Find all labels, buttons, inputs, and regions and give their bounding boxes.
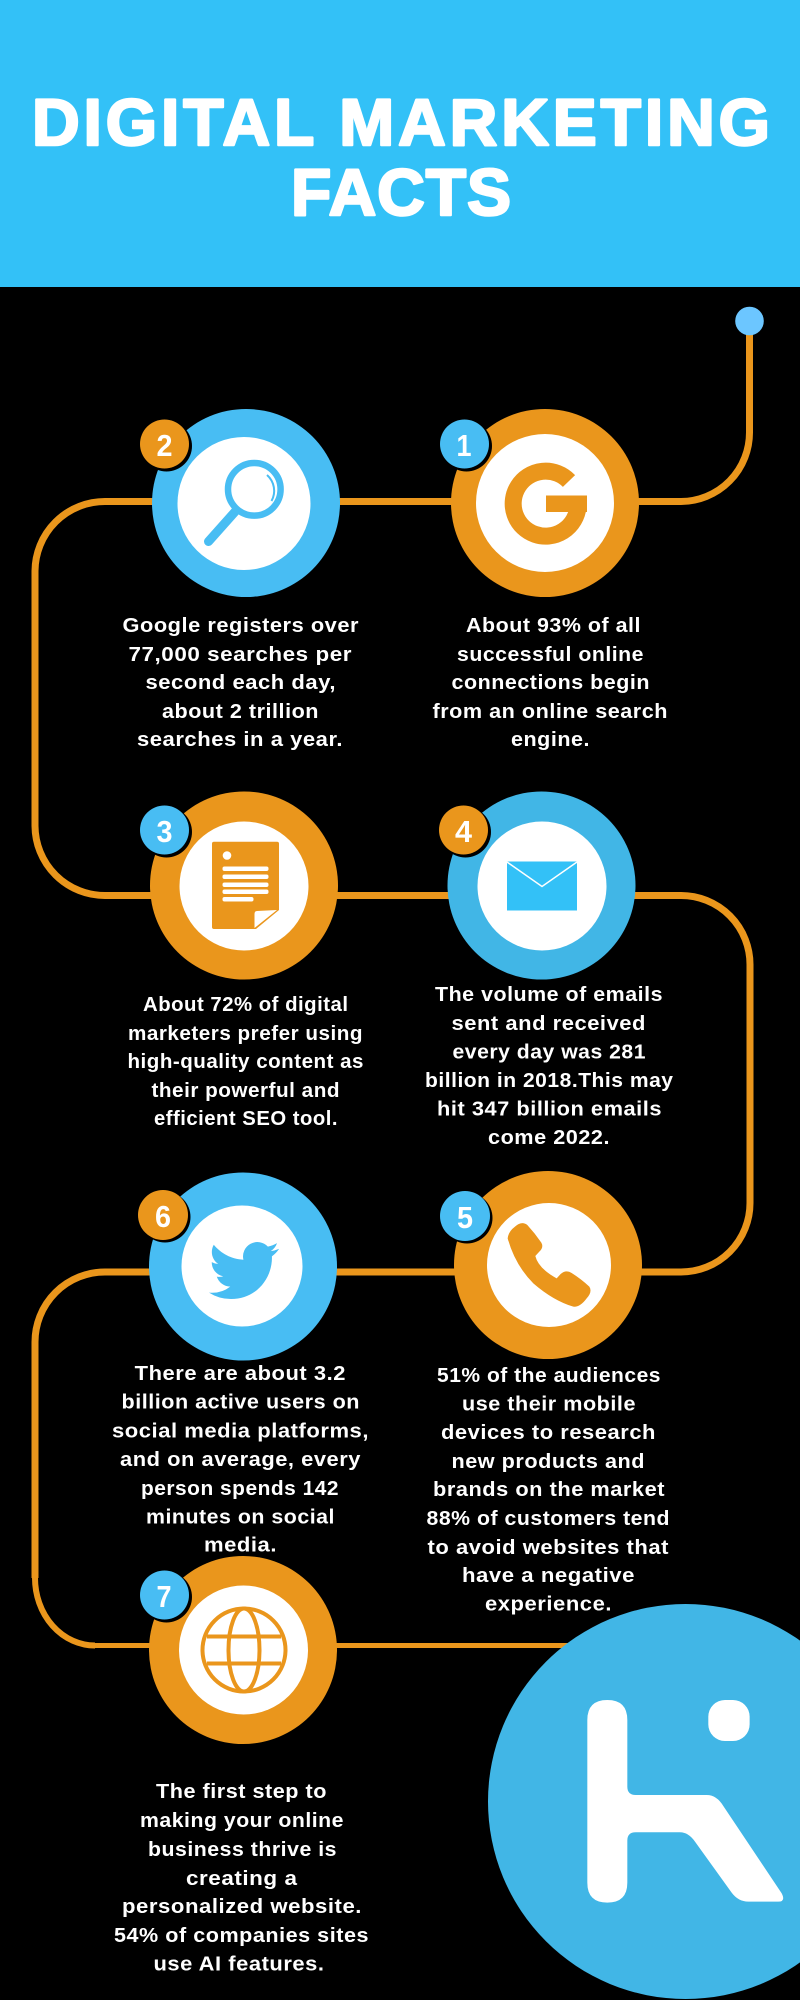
badge 2: 2 xyxy=(156,428,172,463)
icon: envelope xyxy=(507,862,577,910)
text: fact 2: 77,000 searches per xyxy=(128,643,352,666)
text: fact 2: Google registers over xyxy=(122,614,359,637)
text: fact 7: 54% of companies sites xyxy=(114,1924,369,1947)
icon: twitter bird xyxy=(209,1242,279,1299)
text: fact 7: personalized website. xyxy=(122,1895,362,1918)
badge 4 xyxy=(439,806,491,858)
step 3: content xyxy=(140,792,338,980)
text: fact 2: second each day, xyxy=(146,671,336,694)
connector path xyxy=(35,321,750,1646)
text: fact 3: About 72% of digital xyxy=(143,993,348,1016)
title xyxy=(32,85,770,229)
step 5: phone xyxy=(440,1171,642,1359)
badge 4: 4 xyxy=(455,814,473,849)
text: fact 6: billion active users on xyxy=(122,1390,360,1414)
text: fact 5: have a negative xyxy=(462,1564,635,1587)
text: fact 1 xyxy=(432,614,668,751)
text: fact 4: sent and received xyxy=(452,1012,646,1035)
text: fact 7: creating a xyxy=(186,1867,298,1890)
text: fact 4: come 2022. xyxy=(488,1126,610,1149)
text: fact 2 xyxy=(122,614,359,751)
icon: google G xyxy=(513,471,587,536)
text: fact 7: use AI features. xyxy=(154,1953,324,1976)
text: fact 2: searches in a year. xyxy=(137,728,343,751)
title: FACTS xyxy=(291,155,511,229)
text: fact 6: minutes on social xyxy=(146,1506,335,1529)
text: fact 3: their powerful and xyxy=(152,1079,340,1102)
text: fact 5: experience. xyxy=(485,1592,612,1616)
text: fact 5: to avoid websites that xyxy=(428,1536,669,1559)
badge 6 xyxy=(138,1190,190,1242)
text: fact 3: efficient SEO tool. xyxy=(154,1107,338,1130)
badge 7 xyxy=(140,1570,192,1622)
text: fact 6: media. xyxy=(204,1534,277,1556)
icon: globe xyxy=(202,1608,286,1692)
text: fact 5: use their mobile xyxy=(462,1392,636,1416)
step 7: website xyxy=(140,1556,337,1744)
badge 2 xyxy=(140,420,192,472)
text: fact 1: successful online xyxy=(457,643,644,666)
title: DIGITAL MARKETING xyxy=(32,85,770,159)
text: fact 6: social media platforms, xyxy=(112,1420,369,1442)
text: fact 5: devices to research xyxy=(441,1421,656,1444)
logo xyxy=(488,1604,800,1999)
icon: magnifying glass xyxy=(208,463,281,542)
text: fact 2: about 2 trillion xyxy=(162,700,319,723)
step 1: google xyxy=(440,409,639,597)
text: fact 6: There are about 3.2 xyxy=(135,1362,346,1385)
text: fact 7: business thrive is xyxy=(148,1838,337,1861)
text: fact 4: every day was 281 xyxy=(452,1040,646,1064)
text: fact 6: person spends 142 xyxy=(141,1477,339,1500)
text: fact 4 xyxy=(425,983,674,1149)
title banner xyxy=(0,0,800,287)
text: fact 3 xyxy=(128,993,364,1130)
badge 6: 6 xyxy=(155,1199,171,1234)
text: fact 4: hit 347 billion emails xyxy=(437,1098,662,1121)
badge 3 xyxy=(140,806,192,858)
text: fact 4: billion in 2018.This may xyxy=(425,1069,674,1092)
text: fact 7 xyxy=(114,1780,369,1976)
badge 5: 5 xyxy=(457,1200,473,1235)
text: fact 6 xyxy=(112,1362,369,1556)
step 4: email xyxy=(439,792,636,980)
text: fact 1: from an online search xyxy=(432,700,668,723)
text: fact 7: making your online xyxy=(140,1809,344,1832)
badge 5 xyxy=(440,1191,492,1244)
text: fact 4: The volume of emails xyxy=(435,983,663,1006)
badge 1: 1 xyxy=(456,428,472,463)
badge 7: 7 xyxy=(156,1579,172,1614)
step 2: search xyxy=(140,409,340,597)
text: fact 3: marketers prefer using xyxy=(128,1022,363,1045)
text: fact 5: 51% of the audiences xyxy=(437,1364,661,1387)
start dot xyxy=(735,307,764,335)
text: fact 5 xyxy=(426,1364,670,1616)
text: fact 5: 88% of customers tend xyxy=(426,1507,670,1530)
icon: document xyxy=(212,842,279,929)
text: fact 1: About 93% of all xyxy=(466,614,641,637)
step 6: twitter xyxy=(138,1172,337,1360)
text: fact 5: new products and xyxy=(452,1450,645,1473)
text: fact 3: high-quality content as xyxy=(128,1050,364,1073)
text: fact 1: connections begin xyxy=(452,671,650,694)
badge 3: 3 xyxy=(156,814,172,849)
badge 1 xyxy=(440,420,492,472)
text: fact 5: brands on the market xyxy=(433,1478,665,1501)
text: fact 6: and on average, every xyxy=(120,1448,361,1471)
icon: telephone xyxy=(508,1223,591,1307)
text: fact 7: The first step to xyxy=(156,1780,327,1803)
text: fact 1: engine. xyxy=(511,728,590,751)
